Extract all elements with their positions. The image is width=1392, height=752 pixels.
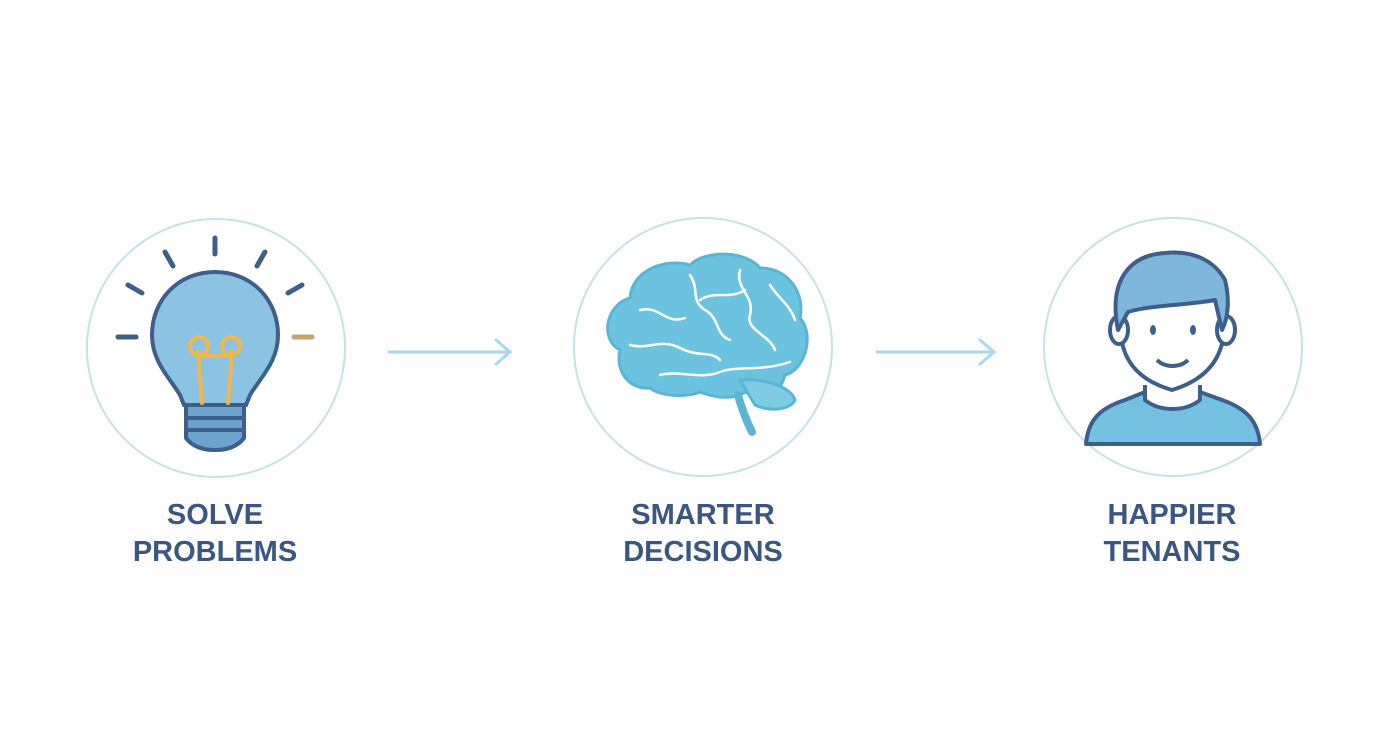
- step 3: happier tenants: [1044, 218, 1302, 568]
- arrow 1: [389, 340, 510, 364]
- step 1: solve problems: [87, 219, 345, 568]
- label 3: HAPPIER: [1108, 499, 1237, 531]
- arrow 2: [877, 340, 994, 364]
- step 3: happier tenants: TENANTS: [1104, 536, 1240, 568]
- icon: brain: [608, 254, 807, 432]
- circle 3: [1044, 218, 1302, 476]
- step 1: solve problems: PROBLEMS: [133, 536, 297, 568]
- step 2: smarter decisions: DECISIONS: [623, 536, 783, 568]
- label 2: SMARTER: [631, 499, 775, 531]
- icon: person: [1086, 253, 1260, 444]
- label 1: SOLVE: [167, 499, 263, 531]
- icon: light bulb: [118, 238, 312, 450]
- step 2: smarter decisions: [574, 218, 832, 568]
- circle 1: [87, 219, 345, 477]
- circle 2: [574, 218, 832, 476]
